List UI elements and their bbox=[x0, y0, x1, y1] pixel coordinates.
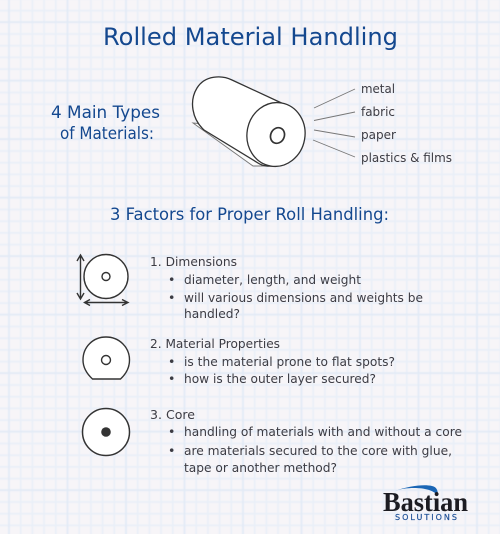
text: material properties: • bbox=[168, 371, 175, 386]
icon: roll end face bbox=[242, 98, 310, 171]
material labels: plastics & films bbox=[361, 150, 452, 165]
text: dimensions bbox=[150, 254, 423, 321]
text: material properties: • bbox=[168, 354, 175, 369]
icon: dimensions bbox=[77, 254, 128, 306]
text: dimensions: will various dimensions and weights be bbox=[184, 290, 423, 305]
logo subtitle: SOLUTIONS bbox=[395, 513, 457, 522]
logo wordmark: Bastian bbox=[383, 487, 468, 517]
logo: Bastian Solutions bbox=[383, 485, 468, 522]
material labels bbox=[361, 81, 452, 165]
heading: 4 main types of materials: 4 Main Types bbox=[51, 103, 160, 122]
text: core: tape or another method? bbox=[184, 460, 337, 475]
logo swoosh bbox=[395, 485, 438, 496]
text: dimensions: diameter, length, and weight bbox=[184, 272, 361, 287]
title: Rolled Material Handling bbox=[103, 23, 398, 51]
text: core: are materials secured to the core with glue, bbox=[184, 443, 452, 458]
text: material properties: how is the outer layer secured? bbox=[184, 371, 376, 386]
text: dimensions: • bbox=[168, 290, 175, 305]
icon: sheet unrolling under the roll bbox=[193, 123, 268, 166]
text: material properties bbox=[150, 336, 395, 386]
text: dimensions: handled? bbox=[184, 306, 240, 321]
text: dimensions: • bbox=[168, 272, 175, 287]
text: core: handling of materials with and without a core bbox=[184, 424, 462, 439]
text: core: 3. Core bbox=[150, 407, 195, 422]
icon: roll body bbox=[193, 77, 288, 166]
text: dimensions: 1. Dimensions bbox=[150, 254, 237, 269]
heading: 3 factors: 3 Factors for Proper Roll Handling: bbox=[110, 205, 389, 224]
icon: material roll bbox=[193, 77, 310, 171]
text: material properties: is the material prone to flat spots? bbox=[184, 354, 395, 369]
leader lines bbox=[313, 89, 355, 157]
text: material properties: 2. Material Properties bbox=[150, 336, 280, 351]
text: core bbox=[150, 407, 462, 475]
material labels: metal bbox=[361, 81, 395, 96]
icon: core bbox=[82, 408, 130, 456]
material labels: fabric bbox=[361, 104, 395, 119]
text: core: • bbox=[168, 443, 175, 458]
icon: material properties (flat spot) bbox=[83, 337, 130, 379]
text: core: • bbox=[168, 424, 175, 439]
heading: 4 main types of materials: of Materials: bbox=[60, 124, 154, 143]
heading: 4 main types of materials bbox=[51, 103, 160, 143]
icon: roll core hole bbox=[268, 125, 287, 146]
material labels: paper bbox=[361, 127, 397, 142]
